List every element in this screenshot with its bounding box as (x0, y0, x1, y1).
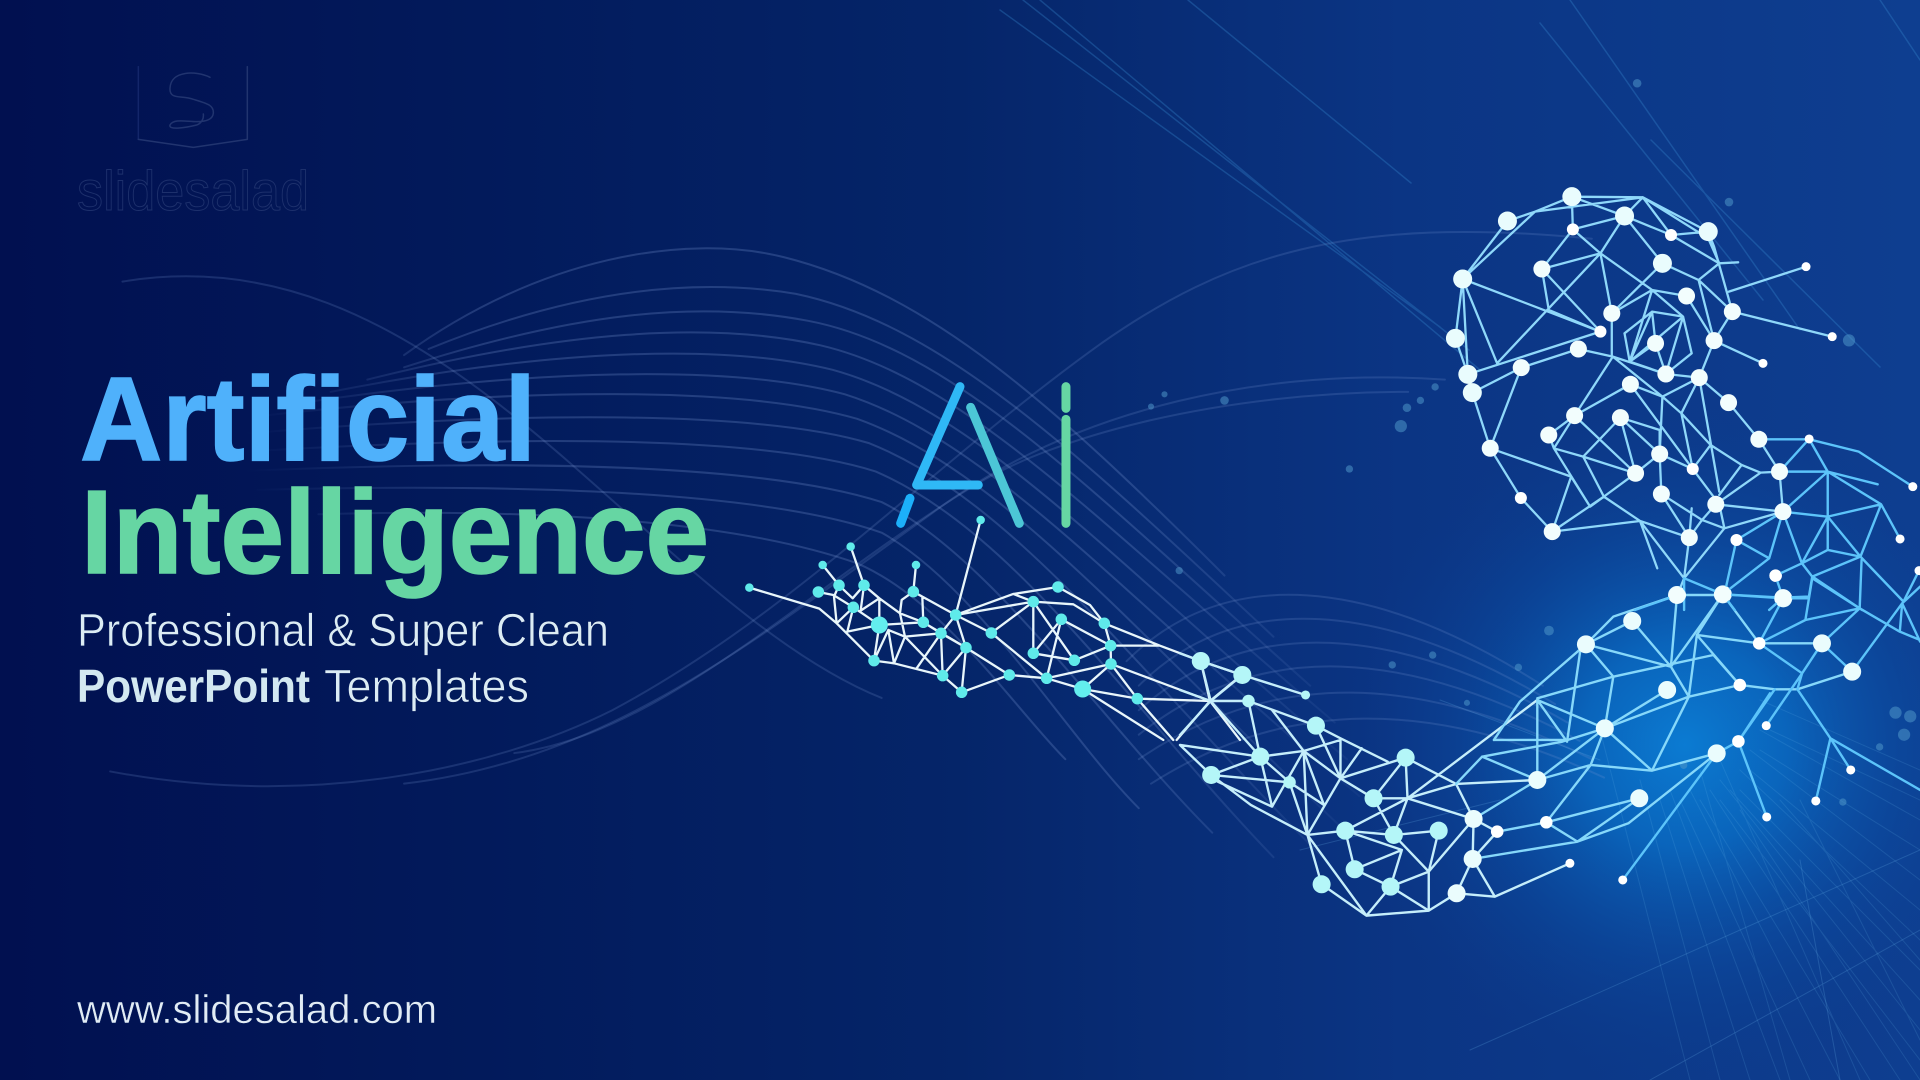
subtitle line 2 (77, 660, 529, 712)
hand nodes (818, 585, 1137, 699)
subtitle bold word: PowerPoint (77, 660, 310, 712)
website url: www.slidesalad.com (76, 988, 437, 1032)
arm tip nodes (1570, 726, 1851, 880)
arm outgoing lines (1623, 560, 1920, 880)
head nodes (1490, 269, 1783, 598)
head mesh lines (1455, 197, 1832, 595)
arm cyan nodes (1201, 661, 1439, 887)
arm cyan small nodes (1248, 701, 1290, 782)
upper arm lines (1635, 439, 1919, 610)
letter A (901, 387, 1019, 523)
arm mesh lines, lower (1180, 653, 1570, 916)
hand mesh lines (749, 520, 1247, 740)
upper background rays (1000, 0, 1920, 370)
head small nodes (1521, 229, 1775, 576)
arm white nodes (1457, 594, 1852, 893)
arm white small nodes (1497, 576, 1776, 832)
network arm (1180, 560, 1920, 916)
hand small nodes (749, 520, 981, 588)
arm cyan tip node (1301, 690, 1310, 699)
hand large nodes (879, 625, 1083, 689)
network hand (749, 520, 1247, 740)
subtitle line 1: Professional & Super Clean (77, 604, 609, 656)
head extra-large nodes (1455, 197, 1708, 393)
title: Artificial: Artificial (80, 353, 536, 486)
background wave lines (220, 248, 1359, 857)
title: Intelligence: Intelligence (81, 466, 709, 599)
network head (1455, 197, 1919, 610)
subtitle light word: Templates (324, 660, 529, 712)
long crossing waves (110, 232, 1604, 786)
letter I (1061, 387, 1070, 523)
head tip nodes (1763, 267, 1919, 571)
arm mesh lines, upper (1456, 594, 1852, 859)
logo wordmark: slidesalad (77, 159, 309, 222)
AI logo (901, 387, 1066, 523)
faint particles (1148, 79, 1916, 806)
lower background rays (1300, 700, 1920, 1080)
logo: slidesalad icon (138, 67, 247, 147)
